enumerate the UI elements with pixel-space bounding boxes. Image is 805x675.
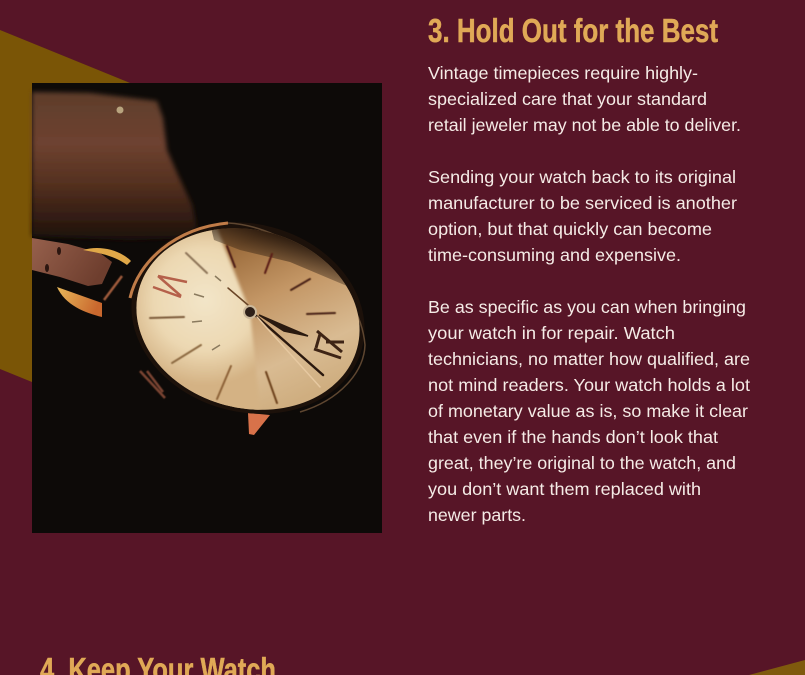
heading: section 3: 3. Hold Out for the Best bbox=[428, 12, 718, 49]
gold lug: upper bbox=[83, 248, 131, 265]
paragraph 2 bbox=[428, 167, 737, 265]
numeral V bbox=[153, 276, 187, 297]
paragraph 1: retail jeweler may not be able to deliver. bbox=[428, 115, 741, 135]
watch hub bbox=[244, 306, 256, 318]
paragraph 2: option, but that quickly can become bbox=[428, 219, 712, 239]
gold lug: lower bbox=[57, 287, 102, 317]
case rim highlight: right bbox=[228, 223, 365, 412]
paragraph 3: of monetary value as is, so make it clear bbox=[428, 401, 748, 421]
paragraph 3: that even if the hands don’t look that bbox=[428, 427, 718, 447]
crown and case edge bbox=[104, 276, 165, 398]
paragraph 2: time-consuming and expensive. bbox=[428, 245, 681, 265]
paragraph 3: technicians, no matter how qualified, are bbox=[428, 349, 750, 369]
fabric in shadow bbox=[32, 92, 197, 240]
hour markers bbox=[150, 246, 335, 403]
small dial marks bbox=[192, 276, 221, 350]
numeral VII bbox=[314, 331, 344, 358]
leather strap bbox=[32, 238, 112, 286]
case rim highlight: upper left bbox=[130, 223, 228, 298]
photo: vintage wristwatch bbox=[32, 83, 386, 533]
watch dial bbox=[136, 228, 360, 410]
paragraph 3: you don’t want them replaced with bbox=[428, 479, 701, 499]
watch lower tip bbox=[248, 413, 270, 435]
gold accent shape: bottom right bbox=[749, 660, 805, 675]
paragraph 1: Vintage timepieces require highly- bbox=[428, 63, 698, 83]
paragraph 3: not mind readers. Your watch holds a lot bbox=[428, 375, 750, 395]
paragraph 3: great, they’re original to the watch, and bbox=[428, 453, 736, 473]
paragraph 2: manufacturer to be serviced is another bbox=[428, 193, 737, 213]
paragraph 1 bbox=[428, 63, 741, 135]
paragraph 3: Be as specific as you can when bringing bbox=[428, 297, 746, 317]
dial right half bbox=[136, 228, 360, 410]
watch hands bbox=[228, 288, 323, 387]
dial light wedge bbox=[136, 229, 262, 410]
fabric highlight bbox=[116, 106, 124, 114]
dial top shadow bbox=[212, 228, 346, 286]
paragraph 1: specialized care that your standard bbox=[428, 89, 707, 109]
paragraph 3: your watch in for repair. Watch bbox=[428, 323, 675, 343]
gold accent shape: left bbox=[0, 30, 130, 420]
paragraph 2: Sending your watch back to its original bbox=[428, 167, 736, 187]
strap stitch holes bbox=[45, 247, 61, 272]
watch case bbox=[110, 197, 386, 439]
photo background bbox=[32, 83, 382, 533]
paragraph 3 bbox=[428, 297, 750, 525]
paragraph 3: newer parts. bbox=[428, 505, 526, 525]
